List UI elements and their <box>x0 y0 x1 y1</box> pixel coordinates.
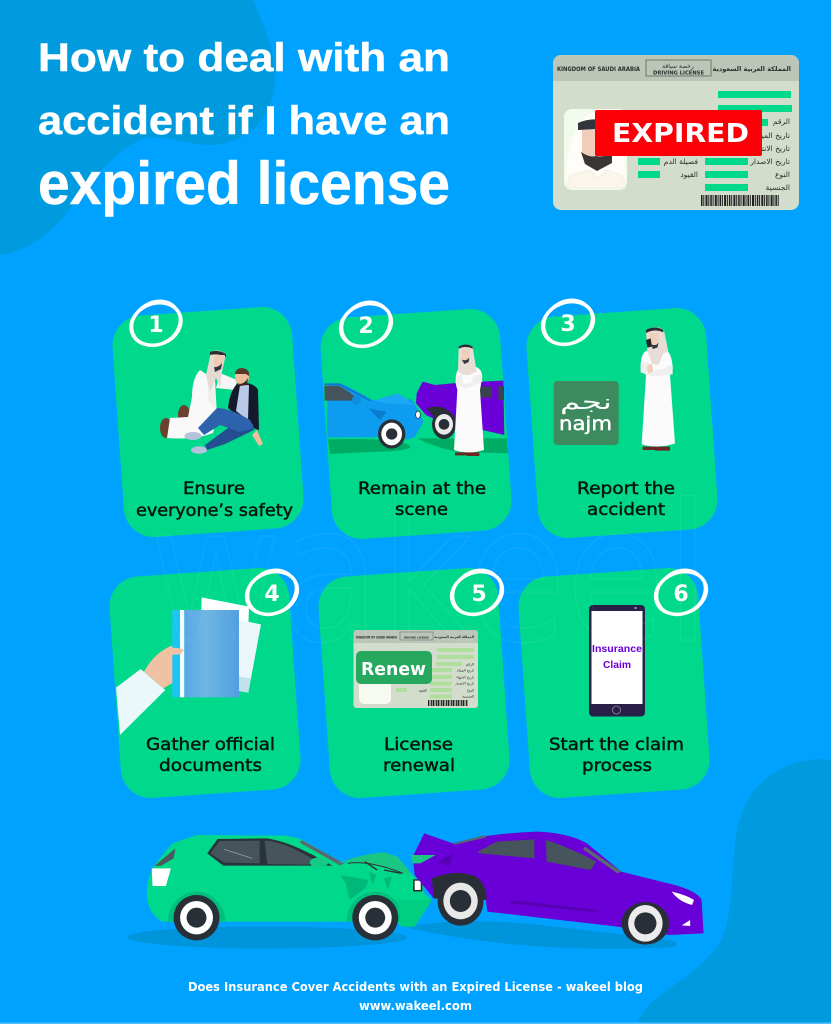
footer <box>188 979 643 1013</box>
illustration: renew license card: النوع <box>467 688 474 692</box>
expired driving license card: الجنسية <box>766 183 790 192</box>
expired driving license card: رخصة سياقة <box>662 63 694 70</box>
expired stamp: EXPIRED <box>612 119 749 149</box>
title: accident if I have an <box>38 99 450 143</box>
illustration: renew license card: الرقم <box>466 662 474 666</box>
title: expired license <box>38 150 450 217</box>
illustration: renew license card <box>354 630 478 708</box>
illustration: renew license card: DRIVING LICENSE <box>404 636 429 640</box>
illustration: renew license card: تاريخ الاصدار <box>454 682 474 686</box>
illustration: helping injured man <box>160 350 263 454</box>
number badge 6 <box>649 561 713 623</box>
number badge 1 <box>124 292 188 354</box>
illustration: renew license card: تاريخ الانتهاء <box>456 676 474 680</box>
number badge 1: 1 <box>148 313 164 338</box>
step text: Gather official <box>146 735 275 754</box>
purple car <box>411 832 704 945</box>
illustration: renew license card: القيود <box>419 688 427 692</box>
expired driving license card: تاريخ الاصدار <box>749 157 790 166</box>
illustration: renew license card: KINGDOM OF SAUDI ARABIA <box>356 636 397 640</box>
expired driving license card <box>553 55 799 210</box>
step text: everyone’s safety <box>136 501 293 520</box>
step text: Ensure <box>183 479 245 498</box>
background blob: top left <box>0 0 276 255</box>
najm logo <box>554 381 619 445</box>
step text <box>577 479 675 519</box>
najm logo: najm <box>559 413 612 435</box>
illustration: renew license card: Renew <box>361 659 426 680</box>
number badge 2: 2 <box>358 314 374 339</box>
watermark: wakeel <box>150 464 710 685</box>
step text: renewal <box>383 756 455 775</box>
illustration: man on phone <box>641 327 675 451</box>
background blob: bottom right <box>637 759 831 1024</box>
driver photo <box>564 109 627 190</box>
number badge 4 <box>240 561 304 623</box>
barcode <box>701 195 779 206</box>
footer: Does Insurance Cover Accidents with an Expired License - wakeel blog <box>188 979 643 994</box>
step text <box>146 735 275 775</box>
illustration: phone with insurance claim <box>589 605 645 716</box>
step text <box>136 479 293 520</box>
panel: step 1 ensure safety <box>110 305 306 539</box>
number badge 2 <box>334 293 398 355</box>
step text: License <box>384 735 453 754</box>
expired driving license card: فصيلة الدم <box>664 157 698 166</box>
title: How to deal with an <box>38 36 450 80</box>
number badge 3: 3 <box>560 312 576 337</box>
expired driving license card: تاريخ الانتهاء <box>753 144 790 153</box>
panel: step 5 license renewal <box>316 566 512 800</box>
footer: www.wakeel.com <box>359 998 472 1013</box>
step text: Remain at the <box>358 479 486 498</box>
step text: scene <box>395 500 448 519</box>
green car <box>147 835 432 940</box>
expired driving license card: القيود <box>680 170 698 179</box>
illustration: crashed cars with man <box>324 344 508 456</box>
car shadows <box>128 921 677 949</box>
expired driving license card: الرقم <box>773 117 790 126</box>
illustration: renew license card: تاريخ الميلاد <box>457 668 474 672</box>
expired driving license card: KINGDOM OF SAUDI ARABIA <box>557 66 640 73</box>
step text: process <box>582 756 652 775</box>
illustration: hand holding folder <box>116 597 261 735</box>
number badge 4: 4 <box>264 582 280 607</box>
step text: accident <box>587 500 666 519</box>
standing man <box>454 344 484 456</box>
number badge 6: 6 <box>673 582 689 607</box>
expired driving license card: DRIVING LICENSE <box>653 70 704 76</box>
step text: documents <box>159 756 262 775</box>
title <box>38 36 450 217</box>
expired stamp <box>595 110 762 156</box>
number badge 5 <box>445 561 509 623</box>
step text <box>549 735 684 775</box>
panel: step 6 start the claim process <box>516 566 712 800</box>
panel: step 2 remain at the scene <box>318 307 514 541</box>
najm logo: نجم <box>560 390 612 415</box>
step text <box>358 479 486 519</box>
step text <box>383 735 455 775</box>
expired driving license card: المملكة العربية السعودية <box>713 65 791 73</box>
panel: step 3 report the accident <box>524 306 720 540</box>
illustration: phone with insurance claim: Claim <box>603 660 631 671</box>
panel: step 4 gather official documents <box>107 566 303 800</box>
illustration: renew license card: المملكة العربية السعودية <box>434 635 474 639</box>
expired driving license card: النوع <box>775 170 790 179</box>
step text: Report the <box>577 479 675 498</box>
number badge 5: 5 <box>471 582 487 607</box>
illustration: car collision <box>128 832 704 949</box>
number badge 3 <box>536 291 600 353</box>
expired driving license card: تاريخ الميلاد <box>754 131 790 140</box>
illustration: renew license card: الجنسية <box>462 694 474 698</box>
illustration: phone with insurance claim: Insurance <box>592 644 642 655</box>
step text: Start the claim <box>549 735 684 754</box>
